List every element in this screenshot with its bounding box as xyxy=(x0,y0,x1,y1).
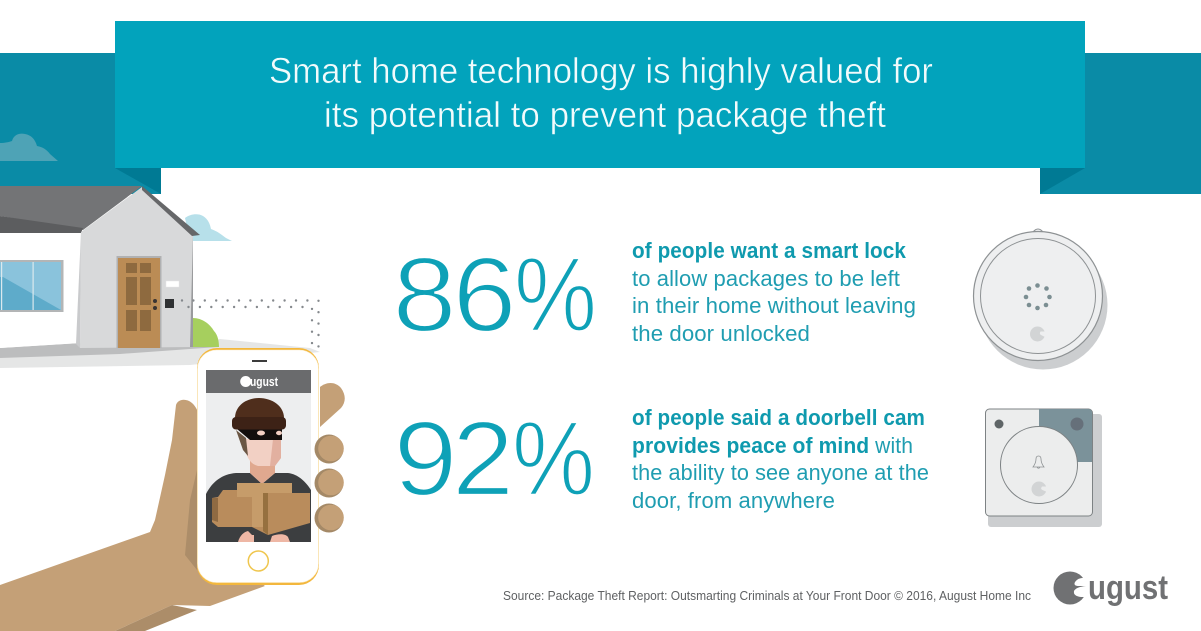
hands xyxy=(238,531,290,542)
house number xyxy=(166,281,179,287)
statistic text: doorbell cam: provides peace of mind with xyxy=(632,433,913,458)
statistic text: smart lock: to allow packages to be left xyxy=(632,266,901,291)
face xyxy=(245,439,281,466)
phone xyxy=(197,348,319,585)
finger top xyxy=(320,383,345,427)
beanie xyxy=(232,398,286,430)
ground path xyxy=(0,339,320,368)
right ribbon band xyxy=(1040,53,1201,194)
statistic text: doorbell cam xyxy=(632,405,929,513)
LED ring xyxy=(1024,283,1052,310)
statistic: 86%: 8 xyxy=(392,236,456,354)
door xyxy=(116,256,162,348)
title text: its potential to prevent package theft xyxy=(324,94,886,135)
boxes xyxy=(212,483,310,535)
August logo xyxy=(1054,569,1168,607)
app header xyxy=(206,370,311,393)
logo mark xyxy=(1030,326,1045,342)
window xyxy=(0,260,64,312)
icon: doorbell cam xyxy=(986,409,1102,527)
logo mark xyxy=(1032,482,1047,496)
icon: smart lock xyxy=(974,229,1108,370)
icon: cloud left xyxy=(0,134,58,161)
statistic text: doorbell cam: the ability to see anyone at the xyxy=(632,460,929,485)
smart doorbell on wall xyxy=(165,299,174,308)
app header: ugust xyxy=(250,375,279,389)
dotted connection line xyxy=(182,300,318,352)
title banner xyxy=(115,21,1085,168)
statistic text: doorbell cam: door, from anywhere xyxy=(632,488,835,513)
hand shadow xyxy=(115,605,197,631)
illustration: house xyxy=(0,186,200,348)
statistic: 92%: % xyxy=(512,400,595,518)
mask xyxy=(237,429,282,440)
title text xyxy=(269,50,933,135)
statistic: 86% xyxy=(392,236,597,354)
icon: cloud right xyxy=(185,214,232,241)
statistic: 92%: 9 xyxy=(394,400,458,518)
hand xyxy=(0,400,265,631)
statistic: 86%: 6 xyxy=(452,236,516,354)
statistic text: smart lock xyxy=(632,238,916,346)
fingers xyxy=(314,434,344,532)
title text: Smart home technology is highly valued for xyxy=(269,50,933,91)
source note: Source: Package Theft Report: Outsmarting Criminals at Your Front Door © 2016, August Home Inc xyxy=(503,589,1031,603)
bell glyph xyxy=(1033,456,1044,468)
left ribbon band xyxy=(0,53,161,194)
illustration: hand holding phone xyxy=(0,348,345,631)
August logo: ugust xyxy=(1088,569,1168,607)
statistic text: smart lock: the door unlocked xyxy=(632,321,810,346)
statistic text: smart lock: in their home without leaving xyxy=(632,293,916,318)
statistic text: doorbell cam: of people said a doorbell cam xyxy=(632,405,925,430)
statistic text: smart lock: of people want a smart lock xyxy=(632,238,906,263)
statistic: 86%: % xyxy=(514,236,597,354)
statistic: 92% xyxy=(394,400,595,518)
thief body xyxy=(206,473,311,542)
bush xyxy=(193,318,219,347)
home button xyxy=(248,551,268,571)
statistic: 92%: 2 xyxy=(452,400,514,518)
thief camera view xyxy=(206,393,311,542)
